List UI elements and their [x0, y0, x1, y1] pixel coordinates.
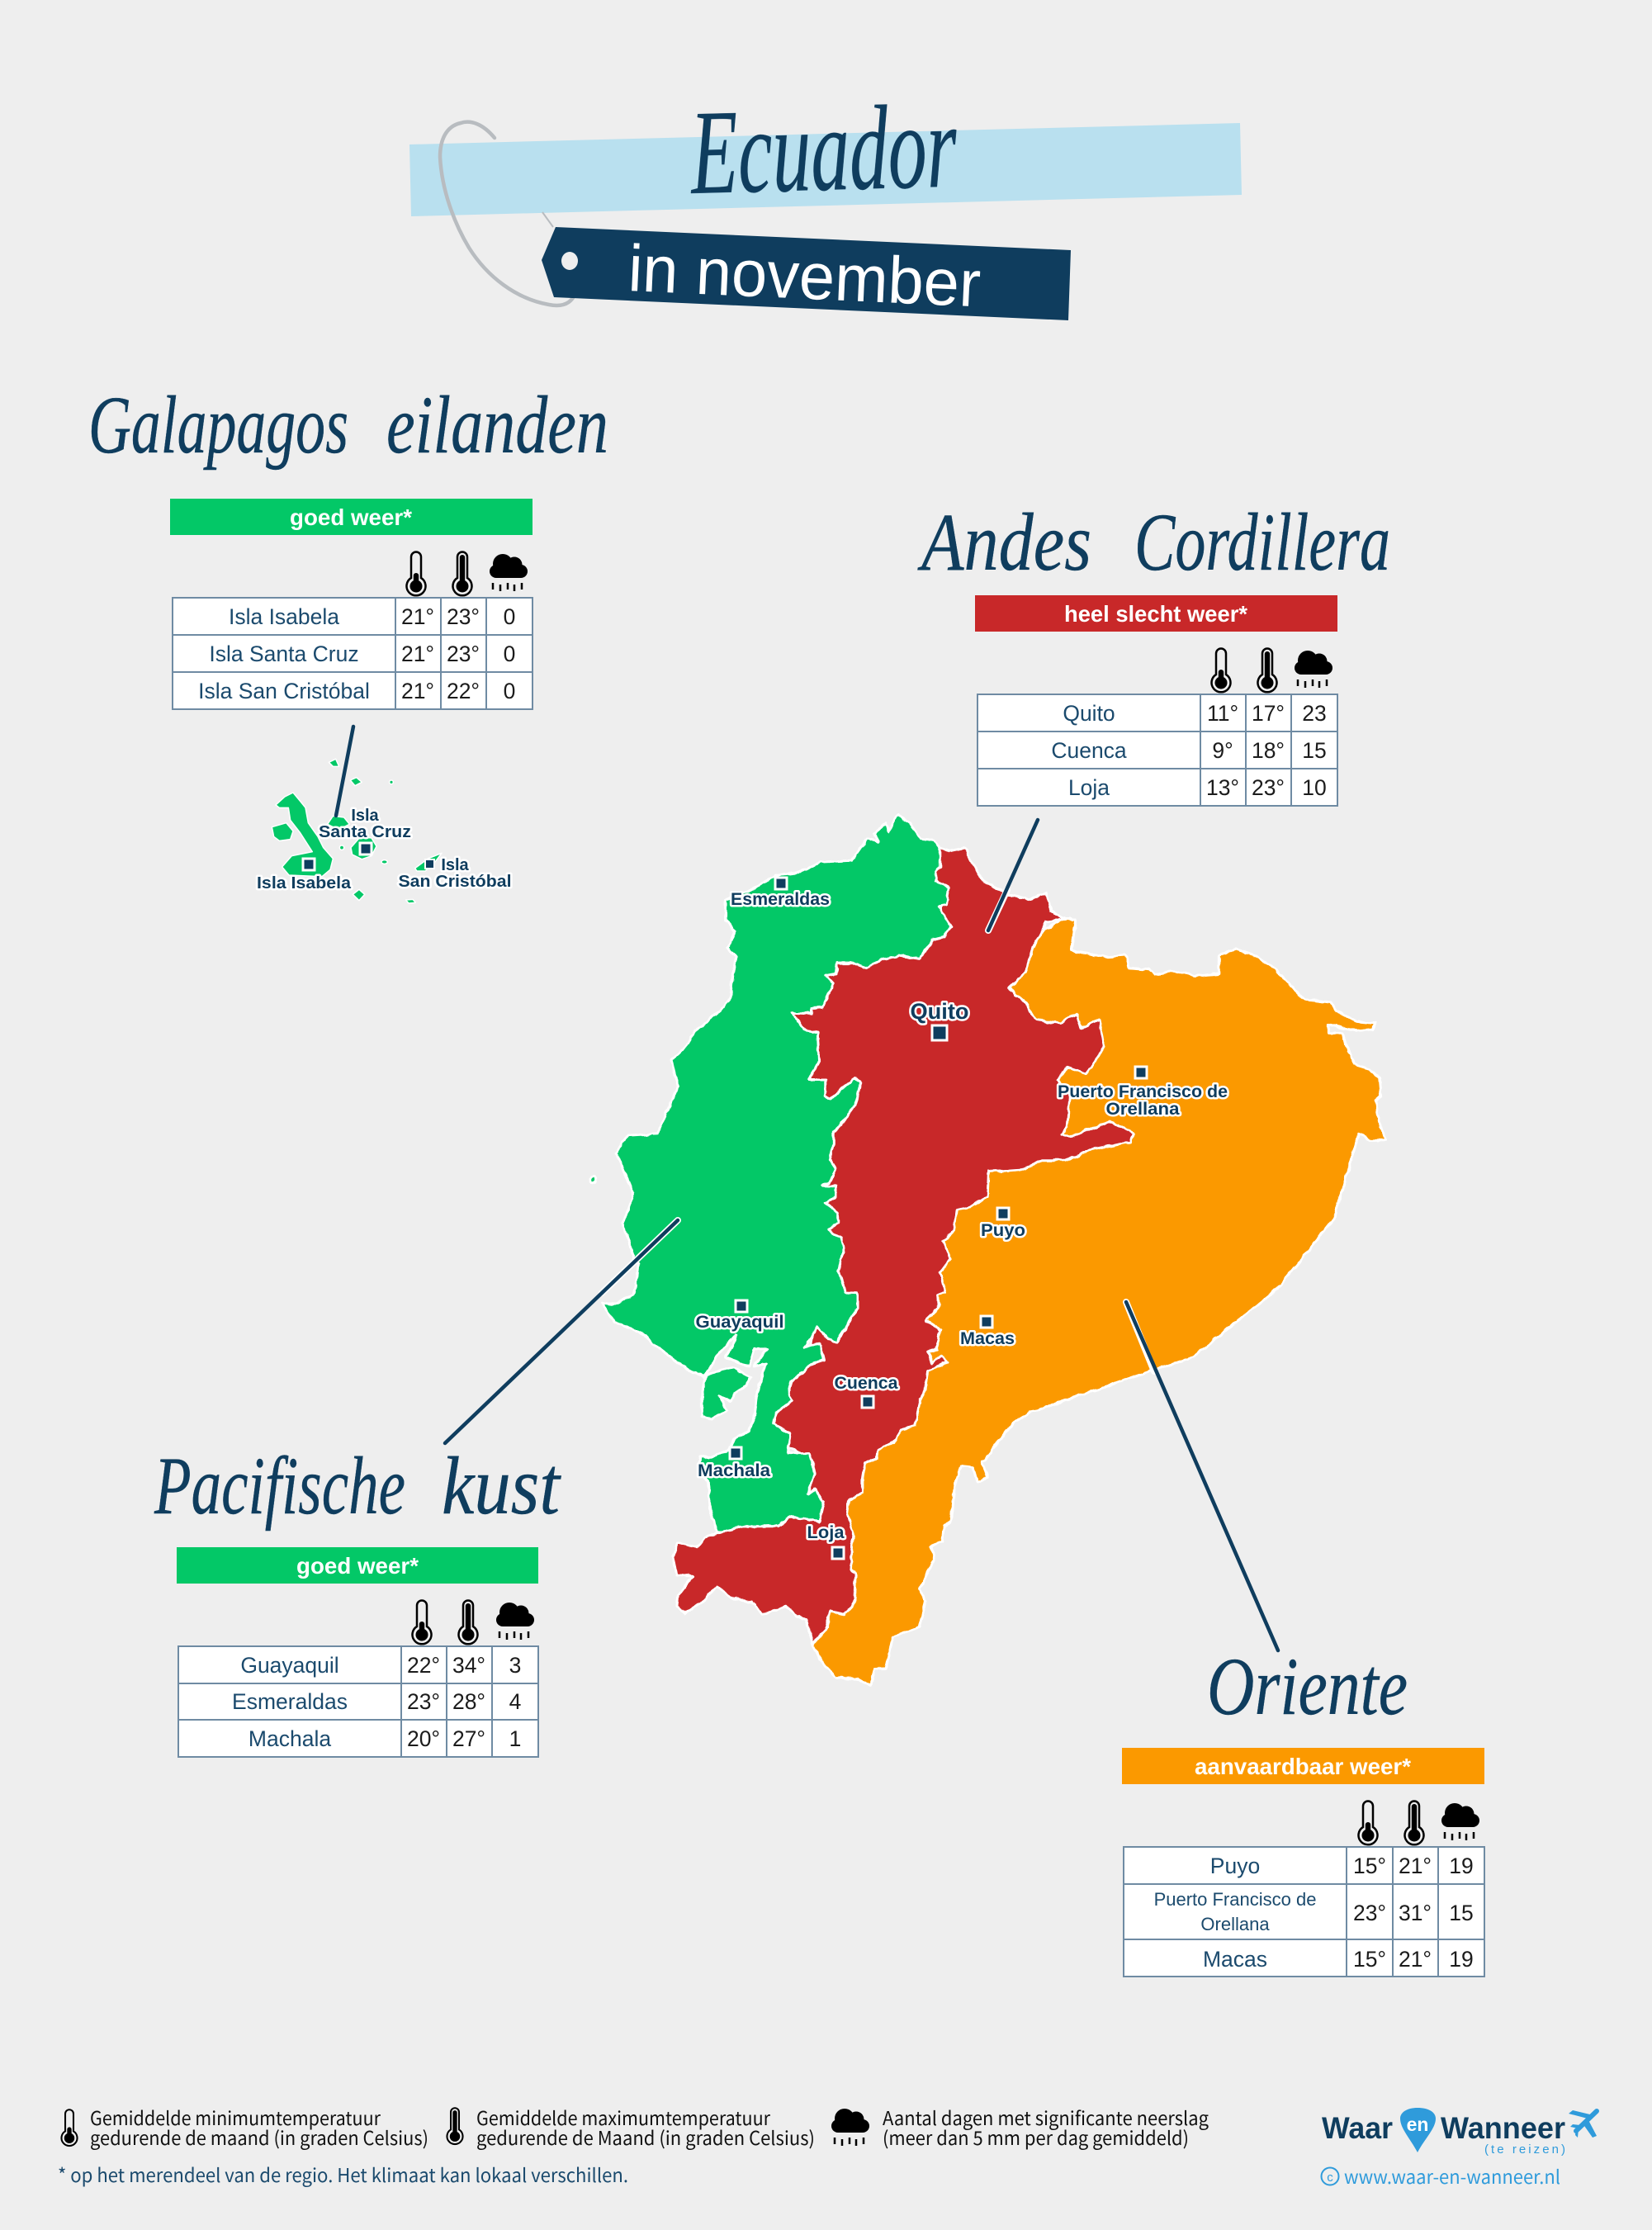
table: [173, 598, 533, 709]
icon: maximum temperature: [1405, 1802, 1423, 1844]
heading: Galapagos: [88, 379, 348, 471]
marker: Puerto Francisco de Orellana: [1135, 1067, 1147, 1078]
marker: San Cristobal: [425, 859, 434, 869]
table: 23°: [407, 1689, 440, 1714]
label: Isla Isabela: Isla Isabela: [257, 874, 352, 892]
callout line: Galapagos: [336, 727, 353, 816]
legend text: maximum 2: gedurende de Maand (in graden Celsius): [476, 2123, 815, 2151]
icon: minimum temperature: [1359, 1802, 1377, 1844]
table: 23°: [1353, 1901, 1386, 1925]
table: 15°: [1353, 1947, 1386, 1972]
rating banner: goed weer*: [290, 504, 412, 530]
region: Oriente: [813, 919, 1386, 1685]
legend text: minimum: Gemiddelde minimumtemperatuur: [90, 2103, 381, 2131]
marker: Santa Cruz: [360, 843, 372, 855]
city markers and labels: [695, 878, 1228, 1559]
rating banner: [1122, 1748, 1484, 1784]
islands: [272, 759, 442, 903]
label: Quito: Quito: [910, 999, 969, 1024]
table: 10: [1302, 775, 1327, 800]
table: 9°: [1212, 738, 1233, 763]
table: 3: [509, 1653, 521, 1678]
marker: Guayaquil: [736, 1300, 747, 1312]
heading: eilanden: [386, 379, 608, 471]
icon: minimum temperature: [1212, 649, 1230, 692]
table: 21°: [401, 604, 434, 629]
label: Orellana: Orellana: [1106, 1100, 1180, 1119]
table: 21°: [1399, 1854, 1432, 1878]
subtitle: in november: in november: [627, 231, 982, 320]
table: 13°: [1206, 775, 1239, 800]
legend text: maximum: Gemiddelde maximumtemperatuur: [476, 2103, 770, 2131]
icon: rain: [1441, 1803, 1479, 1840]
table: [178, 1646, 538, 1757]
rating banner: heel slecht weer*: [1064, 601, 1247, 627]
icon: minimum temperature: [413, 1600, 431, 1644]
ring string: [542, 212, 553, 227]
callout line: Oriente: [1126, 1302, 1278, 1650]
table: 28°: [452, 1689, 485, 1714]
table: 19: [1449, 1947, 1474, 1972]
table: 0: [504, 679, 515, 703]
heading: Oriente: [1207, 1641, 1408, 1732]
marker: Loja: [832, 1547, 844, 1559]
tag ring: [440, 122, 577, 305]
icon: legend minimum temperature: [61, 2109, 78, 2146]
islet: [589, 1177, 596, 1184]
label: Cuenca: Cuenca: [834, 1374, 898, 1393]
copyright symbol: c: [1327, 2171, 1333, 2185]
icon: legend maximum temperature: [447, 2108, 463, 2144]
label: San Cristobal: San Cristóbal: [398, 873, 512, 891]
region: Andes Cordillera: [673, 848, 1134, 1645]
icon: maximum temperature: [459, 1600, 477, 1644]
panel: Galapagos eilanden: [88, 379, 608, 709]
heading: [917, 496, 1390, 588]
table: 0: [504, 642, 515, 666]
copyright symbol: [1321, 2168, 1339, 2185]
table: 23°: [1252, 775, 1285, 800]
table: 19: [1449, 1854, 1474, 1878]
logo: [1321, 2108, 1597, 2190]
logo: te reizen: (te reizen): [1484, 2142, 1565, 2157]
label: Machala: Machala: [698, 1461, 770, 1480]
label: Esmeraldas: Esmeraldas: [731, 890, 830, 909]
heading: Pacifische: [154, 1440, 405, 1532]
rating banner: [170, 499, 533, 535]
table: Isla Isabela: [229, 604, 339, 629]
title: Ecuador: Ecuador: [688, 79, 959, 220]
title band: [409, 123, 1242, 216]
icon: rain: [1295, 651, 1332, 688]
heading: [88, 379, 608, 471]
legend text: rain: Aantal dagen met significante neerslag: [883, 2103, 1209, 2131]
table: 21°: [401, 642, 434, 666]
label: Puerto Francisco de Orellana: Puerto Francisco de: [1058, 1082, 1228, 1101]
table: 21°: [401, 679, 434, 703]
table: 15: [1302, 738, 1327, 763]
Galapagos islands map: [257, 727, 512, 903]
heading: kust: [442, 1440, 561, 1532]
table: Puyo: [1210, 1854, 1260, 1878]
table: 17°: [1252, 701, 1285, 726]
icon: maximum temperature: [1258, 649, 1276, 692]
icon: minimum temperature: [406, 552, 426, 595]
legend: [58, 2103, 1209, 2188]
table: Isla San Cristóbal: [198, 679, 370, 703]
footnote: * op het merendeel van de regio. Het klimaat kan lokaal verschillen.: [58, 2160, 628, 2188]
table: Isla Santa Cruz: [209, 642, 359, 666]
table: 21°: [1399, 1947, 1432, 1972]
icon: legend rain: [831, 2109, 869, 2146]
marker: Machala: [730, 1447, 741, 1459]
panel: Oriente: [1122, 1641, 1484, 1977]
table: 11°: [1207, 701, 1238, 726]
table: [977, 694, 1337, 806]
map of Ecuador: [589, 814, 1386, 1685]
label: Isla (San Cristobal): Isla: [441, 856, 470, 874]
website: www.waar-en-wanneer.nl: [1344, 2161, 1560, 2190]
table: [1124, 1847, 1484, 1977]
table: 1: [509, 1726, 521, 1751]
table: Puerto Francisco de: [1154, 1889, 1316, 1910]
subtitle tag: [542, 227, 1071, 320]
table: Guayaquil: [240, 1653, 339, 1678]
table: Loja: [1068, 775, 1110, 800]
icon: rain: [490, 554, 528, 591]
rating banner: goed weer*: [296, 1553, 419, 1579]
rating banner: aanvaardbaar weer*: [1195, 1754, 1411, 1779]
logo: Wanneer: Wanneer: [1441, 2111, 1565, 2145]
table: 4: [509, 1689, 521, 1714]
label: Loja: Loja: [807, 1523, 845, 1542]
label: Puyo: Puyo: [981, 1221, 1025, 1240]
table: 0: [504, 604, 515, 629]
label: Santa Cruz: Santa Cruz: [319, 823, 411, 841]
table: 23°: [447, 642, 480, 666]
island: Puna: [702, 1368, 750, 1418]
tag hole: [561, 252, 578, 270]
table: 27°: [452, 1726, 485, 1751]
label: Isla (Santa Cruz): Isla: [351, 807, 380, 825]
table: Esmeraldas: [232, 1689, 348, 1714]
label: Macas: Macas: [960, 1329, 1015, 1348]
table: Macas: [1203, 1947, 1267, 1972]
table: 23: [1302, 701, 1327, 726]
icon: rain: [496, 1603, 534, 1640]
table: 22°: [407, 1653, 440, 1678]
label: Guayaquil: Guayaquil: [695, 1313, 784, 1332]
icon: plane: [1569, 2110, 1597, 2138]
icon: maximum temperature: [452, 552, 472, 595]
table: Cuenca: [1051, 738, 1127, 763]
marker: Cuenca: [862, 1396, 873, 1408]
rating banner: [975, 595, 1337, 632]
table: Quito: [1063, 701, 1115, 726]
marker: Puyo: [997, 1208, 1009, 1219]
marker: Esmeraldas: [775, 878, 787, 889]
table: 15: [1449, 1901, 1474, 1925]
logo: Waar: Waar: [1322, 2111, 1393, 2145]
logo: en: en: [1407, 2114, 1428, 2135]
marker: Macas: [981, 1316, 992, 1328]
table: 23°: [447, 604, 480, 629]
table: 18°: [1252, 738, 1285, 763]
panel: Pacifische kust: [154, 1440, 561, 1757]
table: Orellana: [1200, 1914, 1270, 1934]
legend text: rain 2: (meer dan 5 mm per dag gemiddeld): [883, 2123, 1189, 2151]
heading: Cordillera: [1134, 496, 1390, 588]
callout line: Andes: [988, 820, 1038, 930]
table: 20°: [407, 1726, 440, 1751]
region: Pacifische kust: [602, 814, 952, 1533]
panel: Andes Cordillera: [917, 496, 1390, 806]
marker: Isabela: [303, 859, 315, 870]
table: 15°: [1353, 1854, 1386, 1878]
table: 34°: [452, 1653, 485, 1678]
heading: Andes: [917, 496, 1091, 588]
logo: pin: [1400, 2108, 1436, 2152]
title block: [409, 79, 1242, 320]
callout line: Pacifische kust: [445, 1220, 678, 1443]
rating banner: [177, 1547, 538, 1584]
marker: Quito: [932, 1025, 947, 1040]
table: 22°: [447, 679, 480, 703]
table: 31°: [1399, 1901, 1432, 1925]
legend text: minimum 2: gedurende de maand (in graden Celsius): [90, 2123, 428, 2151]
table: Machala: [249, 1726, 331, 1751]
